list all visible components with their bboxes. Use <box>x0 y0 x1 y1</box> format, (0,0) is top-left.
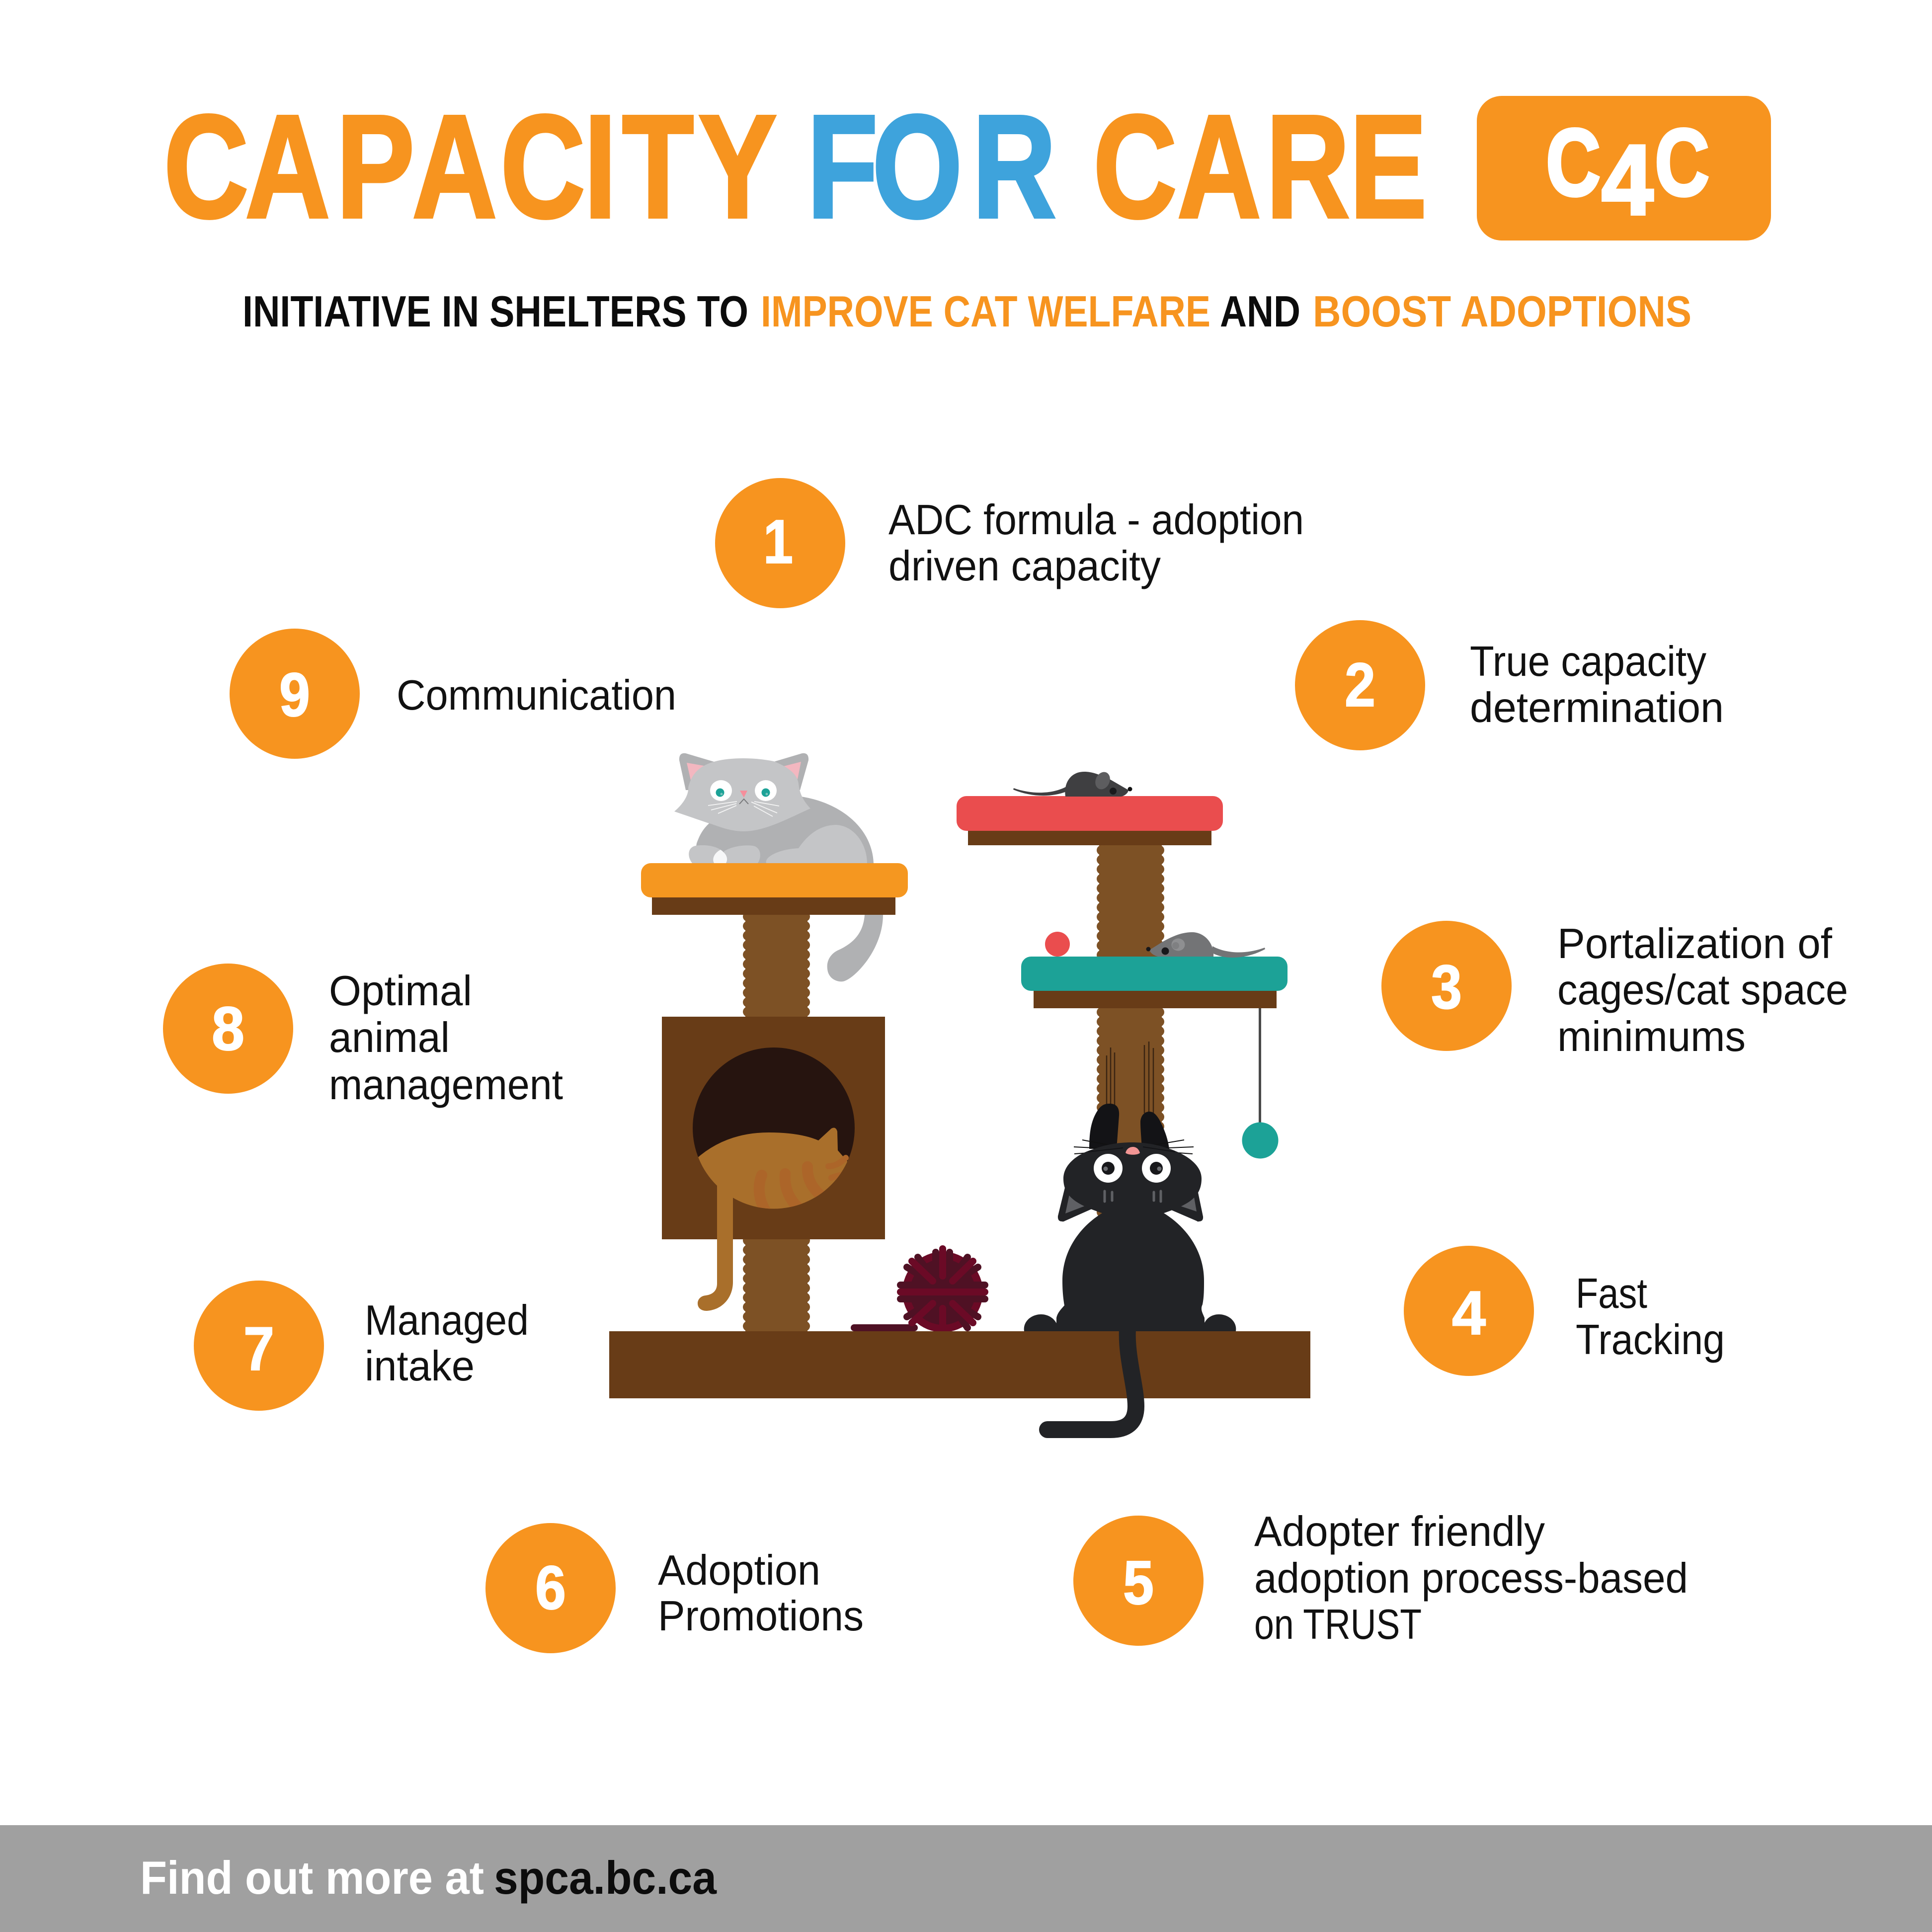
step 6: Adoption <box>658 1547 820 1594</box>
step 1: driven capacity <box>888 543 1161 590</box>
step 4: 4 <box>1452 1279 1486 1348</box>
step 2: 2 <box>1345 651 1375 720</box>
title <box>164 84 1427 248</box>
step 1: 1 <box>763 508 793 576</box>
step 9 <box>230 629 676 759</box>
yarn ball <box>851 1249 985 1332</box>
footer text <box>140 1852 717 1904</box>
step 1: ADC formula - adoption <box>888 496 1304 544</box>
badge: C4C: C <box>1546 109 1601 216</box>
step 4: Fast <box>1576 1270 1647 1317</box>
step 5: adoption process-based <box>1254 1555 1688 1602</box>
subtitle: INITIATIVE IN SHELTERS TO <box>242 287 748 336</box>
footer band <box>0 1825 1932 1932</box>
cat condo box <box>662 1017 885 1239</box>
step 8: management <box>329 1061 563 1109</box>
step 6: Promotions <box>658 1593 864 1640</box>
subtitle: BOOST ADOPTIONS <box>1313 287 1691 336</box>
step 3: minimums <box>1557 1013 1746 1060</box>
grey mouse <box>1146 932 1265 958</box>
step 2: determination <box>1470 684 1724 731</box>
scratch marks <box>1107 1042 1153 1113</box>
step 8: Optimal <box>329 967 472 1015</box>
step 3 <box>1381 920 1848 1060</box>
step 7: 7 <box>243 1315 274 1383</box>
base platform <box>609 1331 1310 1398</box>
step 2: True capacity <box>1470 638 1706 685</box>
step 8: animal <box>329 1014 450 1061</box>
step 9: 9 <box>279 661 310 729</box>
black cat <box>1024 1104 1236 1430</box>
orange cat <box>681 1127 865 1311</box>
subtitle <box>242 287 1691 336</box>
step 5: Adopter friendly <box>1254 1508 1545 1555</box>
hanging teal toy <box>1242 1008 1278 1159</box>
step 3: 3 <box>1431 953 1462 1022</box>
cat tree right post <box>1099 845 1162 1216</box>
step 3: cages/cat space <box>1557 966 1848 1014</box>
red platform <box>957 796 1223 845</box>
footer text: spca.bc.ca <box>494 1852 717 1904</box>
step 3: Portalization of <box>1557 920 1832 967</box>
step 1 <box>715 478 1304 608</box>
grey cat <box>674 753 874 863</box>
step 6: 6 <box>535 1554 566 1622</box>
step 8: 8 <box>212 995 244 1063</box>
badge: C4C: 4 <box>1602 125 1653 236</box>
orange platform <box>641 863 908 915</box>
cat tree left post <box>745 915 807 1331</box>
step 7: Managed <box>365 1297 529 1344</box>
step 9: Communication <box>397 672 676 719</box>
step 7 <box>194 1281 529 1411</box>
badge: C4C: C <box>1655 109 1709 216</box>
step 4: Tracking <box>1576 1316 1725 1364</box>
step 5: 5 <box>1123 1549 1154 1617</box>
step 7: intake <box>365 1343 475 1390</box>
footer text: Find out more at <box>140 1852 484 1904</box>
subtitle: IMPROVE CAT WELFARE <box>761 287 1210 336</box>
step 2 <box>1295 620 1724 750</box>
dark mouse <box>1013 770 1132 797</box>
teal platform <box>1021 957 1288 1008</box>
step 6 <box>485 1523 864 1653</box>
step 5 <box>1073 1508 1688 1648</box>
subtitle: AND <box>1220 287 1300 336</box>
badge: C4C <box>1477 96 1771 241</box>
red ball <box>1045 932 1070 957</box>
step 5: on TRUST <box>1254 1601 1422 1648</box>
title: FOR <box>807 85 1056 248</box>
step 8 <box>163 964 563 1109</box>
title: CARE <box>1093 85 1427 248</box>
grey cat tail <box>827 915 883 981</box>
step 4 <box>1404 1246 1725 1376</box>
title: CAPACITY <box>164 84 777 248</box>
